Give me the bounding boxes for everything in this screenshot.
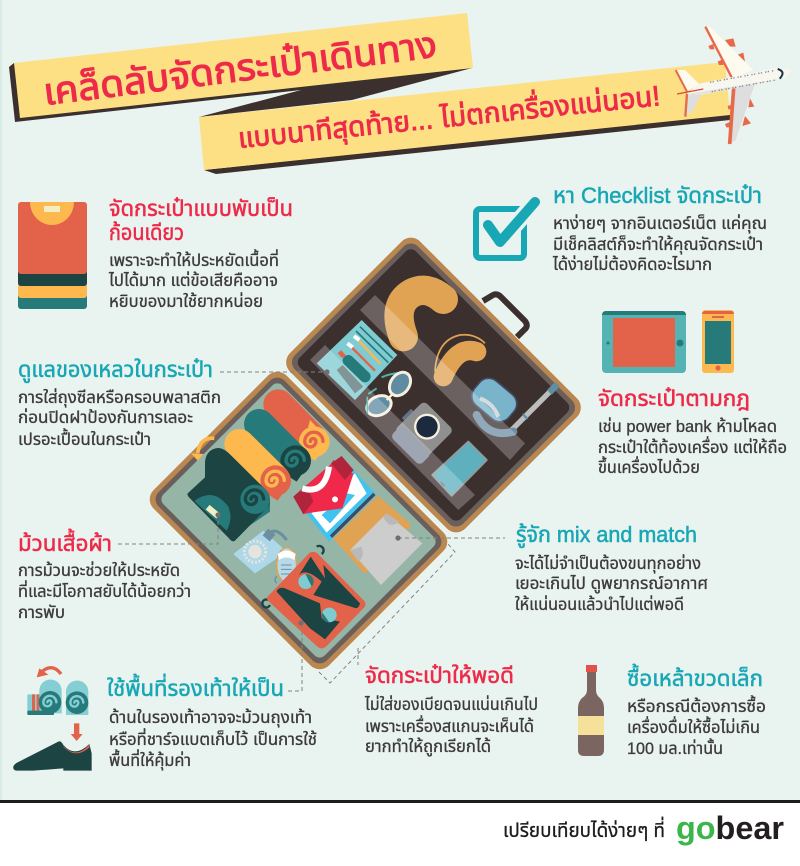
text: follow the rules: เช่น power bank ห้ามโหลด (598, 418, 777, 436)
text: checklist: หาง่ายๆ จากอินเตอร์เน็ต แค่คุณ (553, 215, 767, 233)
icon: tablet and phone (602, 310, 734, 373)
goggles (467, 373, 522, 427)
text: pack just right (364, 663, 538, 756)
icon: airplane (675, 27, 792, 145)
text: checklist: ได้ง่ายไม่ต้องคิดอะไรมาก (552, 256, 712, 274)
text: mix and match (515, 522, 708, 614)
sunscreen bottle (233, 529, 287, 573)
text: follow the rules: จัดกระเป๋าตามกฎ (598, 386, 750, 411)
neck pillow (399, 290, 443, 337)
eye mask (435, 335, 485, 377)
text: small bottles: หรือกรณีต้องการซื้อ (627, 695, 766, 716)
sock rolls (27, 679, 88, 715)
text: look after liquids (18, 357, 221, 449)
text: use shoe space: ด้านในรองเท้าอาจจะม้วนถุงเท้า (109, 709, 312, 727)
folded tan cloth with grey shirt (333, 496, 422, 585)
text: roll clothes: ที่และมีโอกาสยับได้น้อยกว่า (18, 580, 191, 601)
title banner (9, 13, 730, 174)
sunglasses (364, 368, 415, 419)
footer tagline: เปรียบเทียบได้ง่ายๆ ที่ (503, 816, 665, 842)
curved arrow (37, 668, 61, 677)
camera (390, 401, 454, 466)
dark roll (187, 448, 270, 542)
dashed connector: pack fit bracket (319, 544, 455, 683)
dashed connector: mix and match (395, 535, 505, 541)
snorkel (477, 384, 557, 433)
title line 2: แบบนาทีสุดท้าย... ไม่ตกเครื่องแน่นอน! (236, 76, 662, 155)
toiletry bag (317, 320, 397, 400)
text: follow the rules (598, 386, 787, 477)
text: look after liquids: ดูแลของเหลวในกระเป๋า (18, 357, 213, 383)
text: use shoe space: ใช้พื้นที่รองเท้าให้เป็น (107, 673, 284, 701)
upper lid of the suitcase (281, 232, 586, 538)
text: pack as one block: ไปได้มาก แต่ข้อเสียคืออาจ (108, 272, 278, 290)
text: small bottles (627, 663, 766, 758)
orange roll (278, 404, 330, 461)
dashed connector: liquids (220, 369, 330, 375)
icon: folded clothes stack (18, 202, 87, 309)
footer (0, 800, 800, 866)
suitcase (144, 232, 586, 675)
text: follow the rules: ขึ้นเครื่องไปด้วย (598, 456, 700, 477)
shoe (13, 741, 92, 771)
text: mix and match: จะได้ไม่จำเป็นต้องขนทุกอย่าง (515, 555, 701, 573)
icon: checklist tick (476, 202, 535, 258)
tablet (432, 442, 487, 496)
curved gold arrow (191, 438, 214, 461)
text: mix and match: รู้จัก mix and match (516, 522, 697, 548)
text: pack as one block (108, 196, 293, 311)
text: look after liquids: เปรอะเปื้อนในกระเป๋า (18, 428, 151, 449)
teal roll (259, 424, 311, 482)
text: roll clothes: การม้วนจะช่วยให้ประหยัด (18, 562, 180, 580)
text: pack just right: ไม่ใส่ของเบียดจนแน่นเกินไป (364, 696, 538, 714)
text: use shoe space (107, 673, 317, 770)
text: small bottles: เครื่องดื่มให้ซื้อไม่เกิน (627, 716, 760, 737)
text: small bottles: ซื้อเหล้าขวดเล็ก (627, 663, 763, 691)
text: pack just right: ยากทำให้ถูกเรียกได้ (365, 738, 491, 756)
text: checklist: หา Checklist จัดกระเป๋า (553, 183, 762, 208)
text: use shoe space: หรือที่ชาร์จแบตเก็บไว้ เป็นการใช้ (109, 728, 317, 749)
clear pockets (310, 295, 525, 510)
suitcase handle (483, 294, 527, 337)
text: look after liquids: ก่อนปิดฝาป้องกันการเลอะ (18, 409, 193, 427)
title line 1: เคล็ดลับจัดกระเป๋าเดินทาง (41, 24, 439, 113)
gobear logo: gobear (676, 810, 784, 846)
text: use shoe space: พื้นที่ให้คุ้มค่า (109, 749, 191, 770)
text: look after liquids: การใส่ถุงซีลหรือครอบพลาสติก (18, 389, 221, 407)
gold roll (239, 444, 291, 501)
text: pack as one block: จัดกระเป๋าแบบพับเป็น (109, 196, 293, 221)
text: roll clothes: การพับ (18, 604, 65, 622)
icon: rolled socks into shoe (13, 668, 92, 771)
text: checklist (552, 183, 767, 274)
text: checklist: มีเช็คลิสต์ก็จะทำให้คุณจัดกระเป๋า (553, 236, 763, 254)
icon: wine bottle (578, 665, 604, 756)
dashed connector: rolled clothes (118, 512, 221, 544)
text: mix and match: ให้แน่นอนแล้วนำไปแต่พอดี (515, 596, 684, 614)
text: pack just right: จัดกระเป๋าให้พอดี (365, 663, 514, 688)
dashed connector: shoes (288, 620, 304, 691)
text: follow the rules: กระเป๋าใต้ท้องเครื่อง แต่ให้ถือ (598, 436, 787, 457)
text: roll clothes (18, 528, 191, 622)
sneaker (275, 548, 297, 583)
shoe bag (262, 546, 365, 648)
text: pack just right: เพราะเครื่องสแกนจะเห็นได้ (365, 715, 534, 736)
down arrow (71, 723, 83, 741)
text: pack as one block: ก้อนเดียว (109, 220, 184, 245)
folded striped shirt (293, 456, 376, 542)
text: pack as one block: เพราะจะทำให้ประหยัดเนื้อที่ (109, 249, 279, 270)
lower half of the suitcase (144, 366, 453, 675)
text: pack as one block: หยิบของมาใช้ยากหน่อย (109, 293, 263, 311)
text: small bottles: 100 มล.เท่านั้น (627, 738, 723, 758)
text: roll clothes: ม้วนเสื้อผ้า (18, 528, 112, 556)
text: mix and match: เยอะเกินไป ดูพยากรณ์อากาศ (515, 575, 708, 593)
rolled clothes (187, 404, 330, 542)
